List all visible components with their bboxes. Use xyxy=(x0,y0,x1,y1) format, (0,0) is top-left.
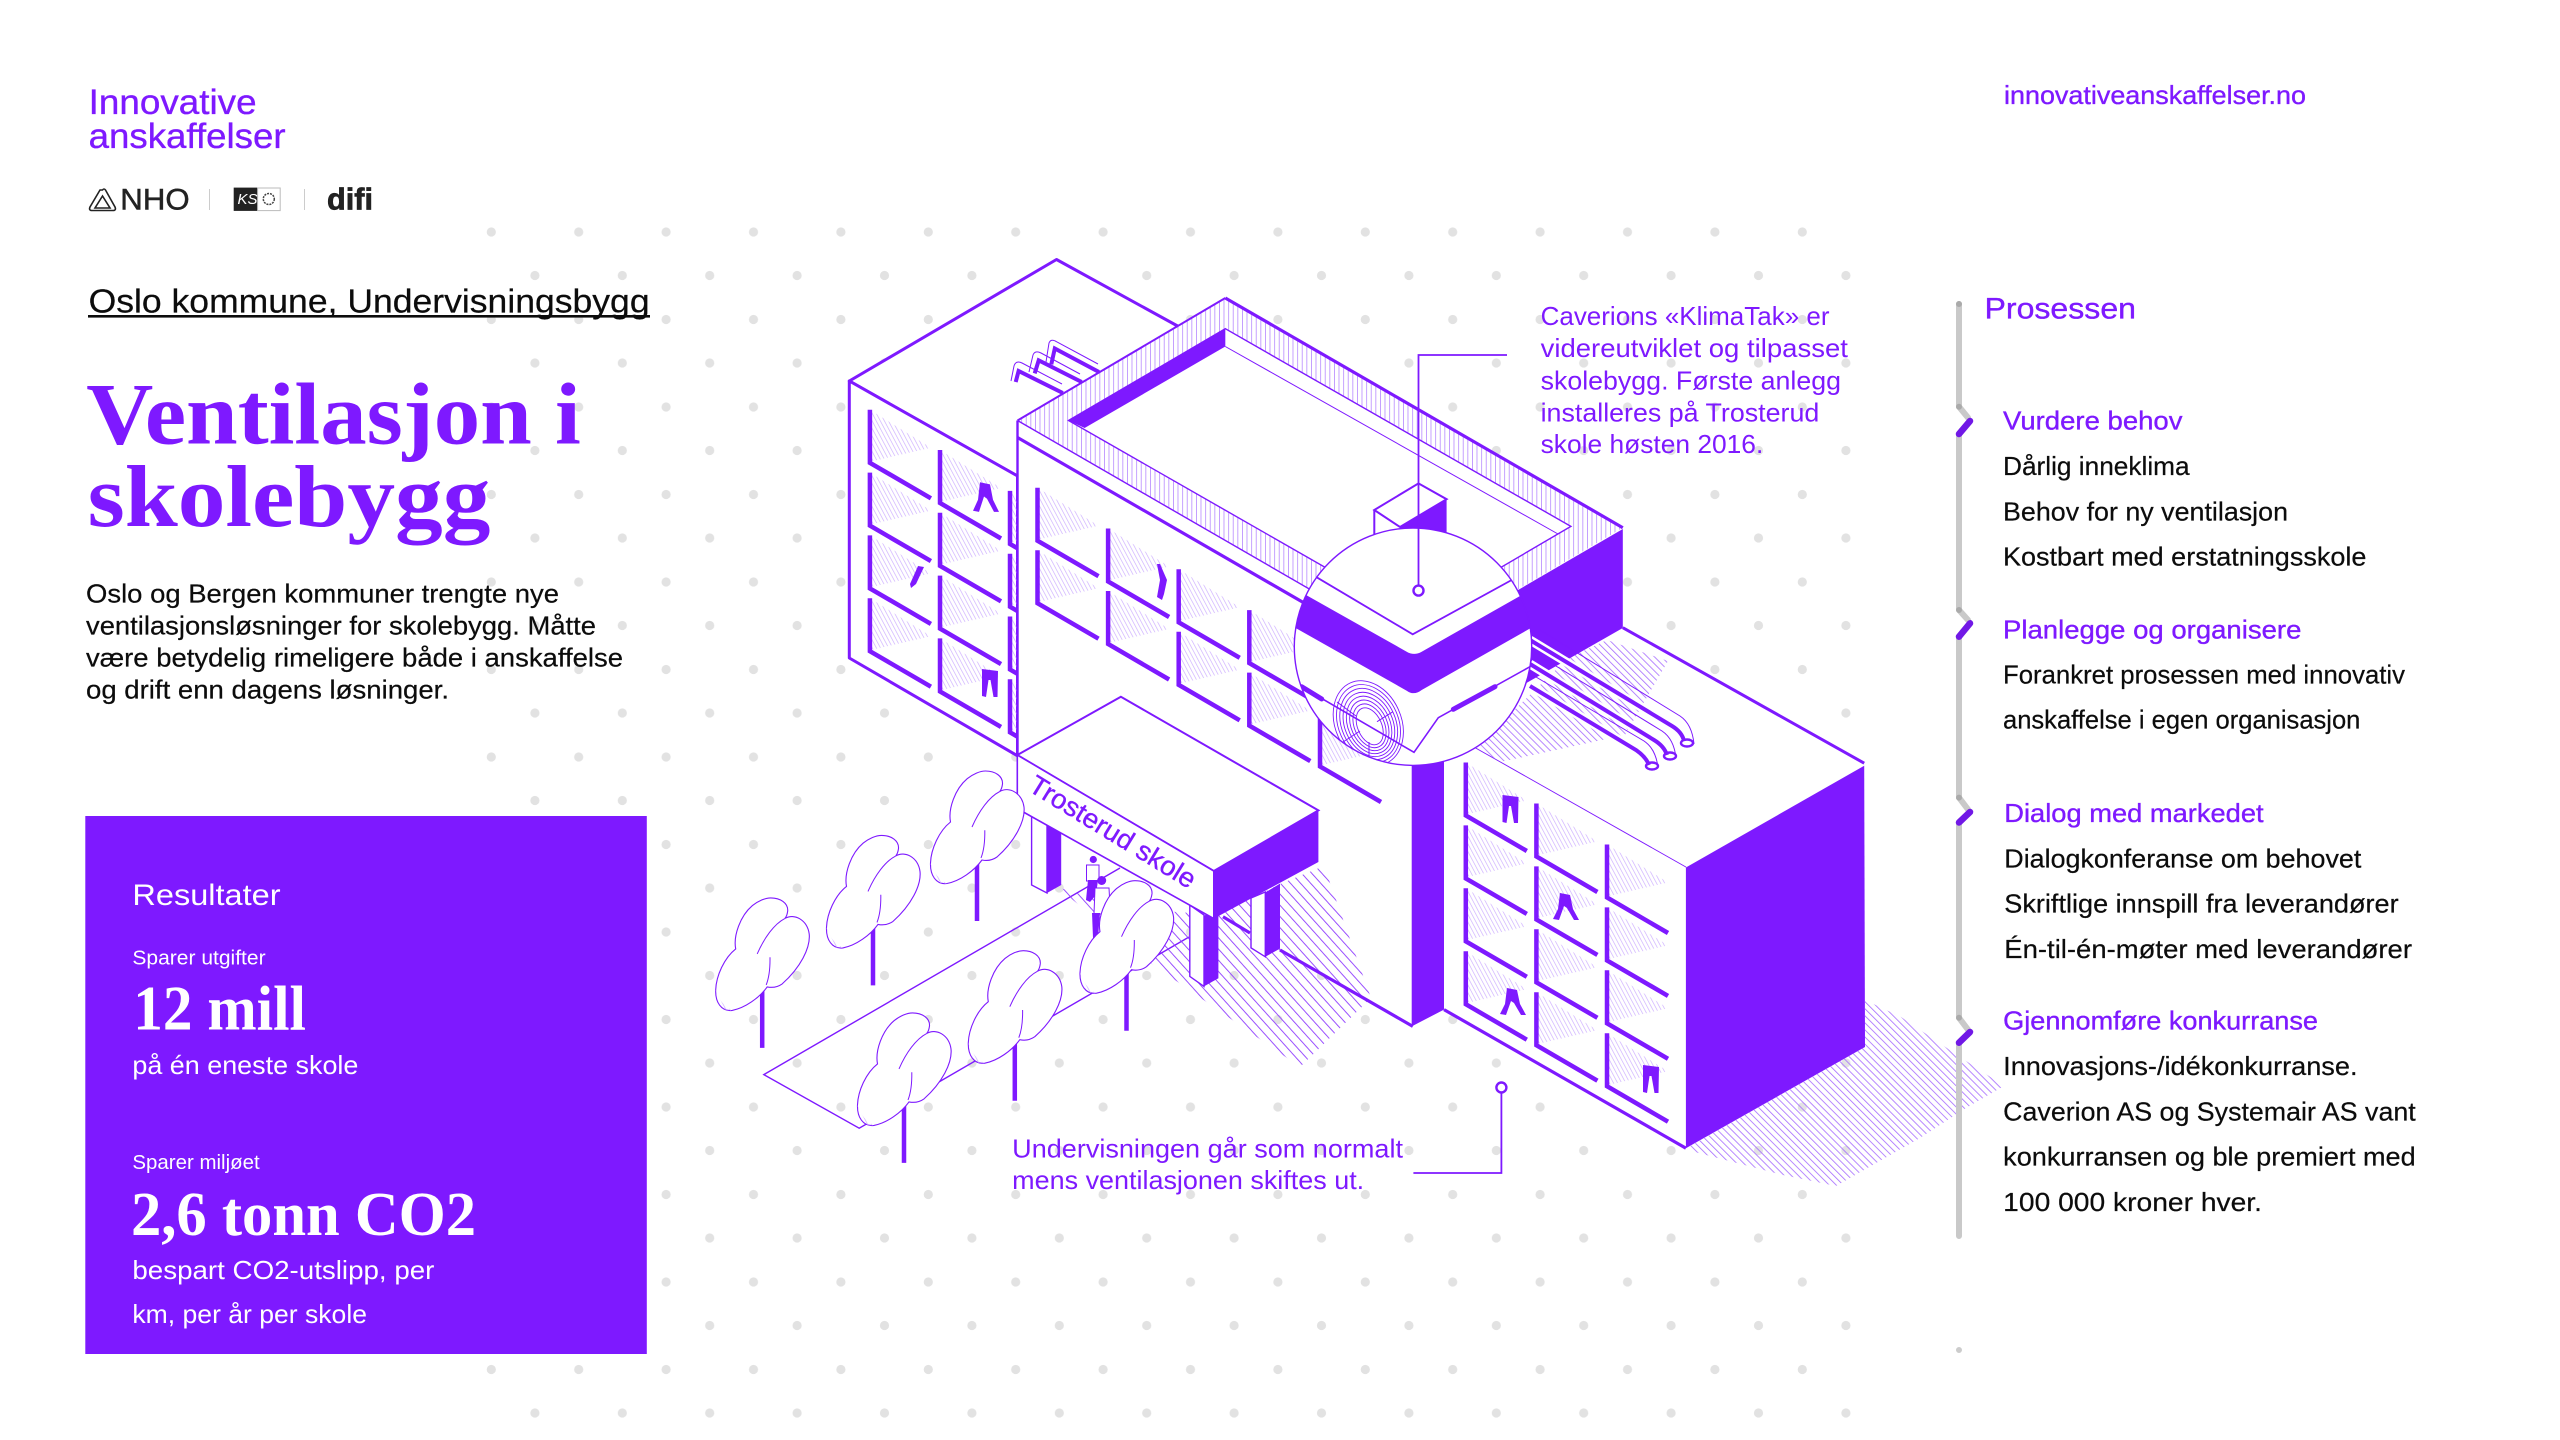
title: Ventilasjon i xyxy=(86,366,581,464)
callout: KlimaTak: skole høsten 2016. xyxy=(1541,429,1763,459)
partner logos: NHO, KS, difi xyxy=(90,181,373,216)
intro paragraph: ventilasjonsløsninger for skolebygg. Måtte xyxy=(86,610,596,640)
step: Gjennomføre konkurranse: konkurransen og ble premiert med xyxy=(2003,1142,2416,1172)
result: environment xyxy=(131,1152,476,1329)
result: environment: 2,6 tonn CO2 xyxy=(131,1181,476,1249)
result: environment: bespart CO2-utslipp, per xyxy=(132,1255,435,1285)
callout: teaching continues xyxy=(1012,1082,1506,1195)
result: environment: km, per år per skole xyxy=(132,1299,367,1329)
title xyxy=(86,366,581,546)
right wing xyxy=(1412,529,1865,1148)
step: Vurdere behov: Behov for ny ventilasjon xyxy=(2003,497,2288,527)
step: Gjennomføre konkurranse: Gjennomføre konkurranse xyxy=(2003,1005,2318,1035)
result: savings: på én eneste skole xyxy=(132,1050,358,1080)
chimney xyxy=(1374,483,1447,537)
result: savings: Sparer utgifter xyxy=(132,948,266,970)
step: Vurdere behov xyxy=(2003,405,2366,572)
step: Gjennomføre konkurranse xyxy=(2003,1005,2416,1217)
logo: Innovative anskaffelser: anskaffelser xyxy=(89,117,286,156)
windows main block xyxy=(1038,488,1381,802)
step: Planlegge og organisere xyxy=(2003,614,2405,734)
windows right wing xyxy=(1466,762,1668,1122)
illustration: school building xyxy=(716,260,2004,1186)
callout: KlimaTak: skolebygg. Første anlegg xyxy=(1541,365,1841,395)
step: Dialog med markedet xyxy=(2004,798,2412,964)
results heading: Resultater xyxy=(132,879,281,912)
entrance pillars xyxy=(1032,816,1280,986)
step: Vurdere behov: Kostbart med erstatningsskole xyxy=(2003,542,2366,572)
step: Dialog med markedet: Dialogkonferanse om behovet xyxy=(2004,844,2362,874)
canopy sign text: Trosterud skole xyxy=(1024,770,1202,894)
logo: Innovative anskaffelser xyxy=(89,83,286,156)
step: Dialog med markedet: Dialog med markedet xyxy=(2004,798,2264,828)
organisation heading: Oslo kommune, Undervisningsbygg xyxy=(89,283,650,320)
step: Gjennomføre konkurranse: Caverion AS og Systemair AS vant xyxy=(2003,1097,2416,1127)
canopy xyxy=(1017,697,1318,919)
entrance shadow xyxy=(1057,866,1371,1067)
people at entrance xyxy=(1086,856,1110,938)
step: Planlegge og organisere: Planlegge og organisere xyxy=(2003,614,2301,644)
step: Gjennomføre konkurranse: Innovasjons-/idékonkurranse. xyxy=(2003,1051,2358,1081)
partner logos: NHO, KS, difi: NHO xyxy=(120,183,190,216)
result: savings: 12 mill xyxy=(133,973,306,1044)
step: Vurdere behov: Vurdere behov xyxy=(2003,405,2182,435)
panel: results xyxy=(85,816,647,1354)
corner pillar xyxy=(1412,640,1444,1026)
process heading: Prosessen xyxy=(1984,292,2136,325)
magnifier lens: ventilation detail xyxy=(1294,528,1532,766)
partner logos: NHO, KS, difi: KS xyxy=(238,191,258,208)
main block base line xyxy=(1223,917,1413,1026)
step: Planlegge og organisere: Forankret prosessen med innovativ xyxy=(2003,659,2405,689)
callout: KlimaTak: Caverions «KlimaTak» er xyxy=(1541,301,1830,331)
callout: teaching continues: mens ventilasjonen skiftes ut. xyxy=(1012,1165,1364,1195)
result: environment: Sparer miljøet xyxy=(132,1152,260,1174)
intro paragraph: og drift enn dagens løsninger. xyxy=(86,674,449,704)
roof edge xyxy=(1317,577,1512,634)
step: Dialog med markedet: Skriftlige innspill fra leverandører xyxy=(2004,889,2399,919)
plaza outline xyxy=(764,868,1189,1128)
title: skolebygg xyxy=(88,449,490,546)
intro paragraph: Oslo og Bergen kommuner trengte nye xyxy=(86,578,559,608)
step: Gjennomføre konkurranse: 100 000 kroner hver. xyxy=(2003,1187,2262,1217)
callout: KlimaTak: installeres på Trosterud xyxy=(1541,397,1819,427)
main block purple side xyxy=(1415,529,1623,730)
website link: innovativeanskaffelser.no xyxy=(2004,80,2306,110)
intro paragraph: være betydelig rimeligere både i anskaffelse xyxy=(86,642,623,672)
logo: Innovative anskaffelser: Innovative xyxy=(89,83,257,122)
step: Dialog med markedet: Én-til-én-møter med leverandører xyxy=(2004,934,2412,964)
background dot grid xyxy=(470,210,1868,1435)
duct lines xyxy=(1324,666,1530,754)
fan xyxy=(1332,680,1404,762)
step: Vurdere behov: Dårlig inneklima xyxy=(2003,451,2190,481)
left roof pipes xyxy=(1011,340,1099,393)
callout: teaching continues: Undervisningen går som normalt xyxy=(1012,1134,1404,1164)
partner logos: NHO, KS, difi: difi xyxy=(327,181,373,216)
result: savings xyxy=(132,948,358,1080)
main block xyxy=(1018,298,1623,1026)
callout: KlimaTak xyxy=(1414,301,1849,596)
process timeline xyxy=(1958,302,1970,1352)
trees xyxy=(716,771,1174,1163)
left wing xyxy=(849,260,1178,768)
right roof pipes xyxy=(1530,630,1694,770)
ground shadow right wing xyxy=(1687,1000,2004,1186)
intro paragraph xyxy=(86,578,623,704)
callout: KlimaTak: videreutviklet og tilpasset xyxy=(1541,333,1849,363)
purple chevron xyxy=(1296,595,1530,694)
step: Planlegge og organisere: anskaffelse i egen organisasjon xyxy=(2003,704,2360,734)
